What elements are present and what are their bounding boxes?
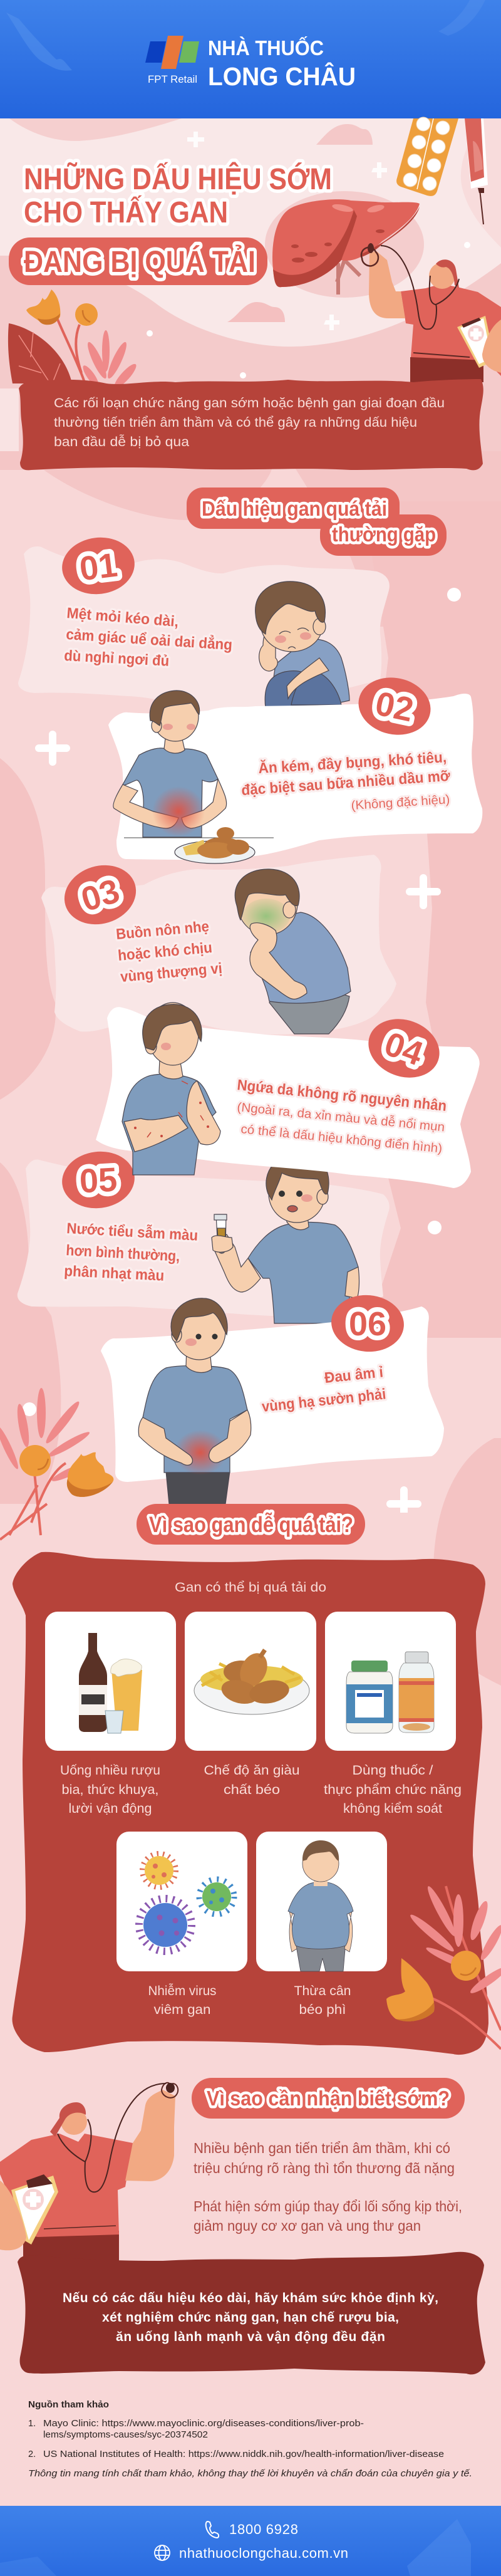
badge 06 [329,1292,406,1355]
caption: virus [148,1984,217,2017]
text: why early paragraphs: triệu chứng rõ ràng thì tổn thương đã nặng [194,2160,455,2176]
card: overweight [256,1832,387,1971]
caption: fatty food: Chế độ ăn giàu [204,1763,299,1778]
heading: common signs [187,488,447,556]
text: sign 05: Nước tiểu sẫm màu [66,1219,199,1244]
text: sign 06: vùng hạ sườn phải [261,1385,387,1416]
text: why early paragraphs: giảm nguy cơ xơ gan và ung thư gan [194,2218,421,2234]
badge 03 [57,857,143,933]
text: sign 05: phân nhạt màu [64,1263,165,1285]
card: virus [116,1832,247,1971]
references: Nguồn tham khảo [28,2400,109,2410]
badge 01: 01 [78,546,120,588]
references [28,2400,472,2479]
text: intro paragraph: ban đầu dễ bị bỏ qua [54,435,189,449]
illustration: right rib pain man [138,1298,251,1504]
text: sign 03: hoặc khó chịu [117,939,213,964]
text: intro paragraph [54,396,445,449]
illustration: nauseous man [235,869,351,1034]
text: call to action: Nếu có các dấu hiệu kéo dài, hãy khám sức khỏe định kỳ, [63,2291,438,2305]
panel: sign 02 [108,671,482,863]
references: lems/symptoms-causes/syc-20374502 [43,2430,208,2440]
illustration: flowers top left [8,289,139,390]
text: causes intro: Gan có thể bị quá tải do [175,1580,326,1595]
logo: Nhà Thuốc Long Châu [208,36,356,91]
text: why early paragraphs: Nhiều bệnh gan tiến triển âm thầm, khi có [194,2140,450,2156]
illustration: man with urine tube [212,1152,359,1323]
caption: medicine: không kiểm soát [343,1802,442,1816]
heading: why liver overloads [137,1504,365,1545]
card: fatty food [185,1612,316,1751]
text: sign 01: dù nghỉ ngơi đủ [64,647,170,670]
illustration: flowers right [386,1884,501,2049]
logo: FPT Retail [145,36,199,85]
decorative plus and dots [23,132,470,1513]
badge 03: 03 [77,872,124,919]
text: sign 04 [236,1077,447,1155]
text: sign 04: (Ngoài ra, da xỉn màu và dễ nổi mụn [237,1100,445,1134]
caption: medicine: Dùng thuốc / [352,1763,433,1778]
title: CHO THẤY GAN [24,196,228,229]
caption: virus: viêm gan [154,2003,210,2017]
text: sign 03: Buồn nôn nhẹ [115,918,210,943]
illustration: doctor pointing [0,2083,178,2262]
text: sign 06: Đau âm ỉ [324,1364,384,1387]
text: sign 02: Ăn kém, đầy bụng, khó tiêu, [258,748,447,777]
text: sign 01: cảm giác uể oải dai dẳng [66,625,233,654]
caption: virus: Nhiễm virus [148,1984,217,1998]
text: call to action [63,2291,438,2344]
title highlight pill: ĐANG BỊ QUÁ TẢI [24,244,256,279]
caption: overweight [294,1984,351,2017]
panel: sign 03 [41,855,396,1035]
caption: alcohol [60,1763,160,1816]
heading: why liver overloads: Vì sao gan dễ quá tải? [149,1512,353,1537]
references: 1. [28,2419,36,2429]
title: NHỮNG DẤU HIỆU SỚM [24,162,332,196]
title highlight pill [9,237,267,285]
text: sign 02: đặc biệt sau bữa nhiều dầu mỡ [241,768,451,799]
references: 2. [28,2449,36,2459]
panel: sign 06 [101,1292,444,1504]
illustration: tired man sitting [256,581,349,708]
references: Thông tin mang tính chất tham khảo, không thay thế lời khuyên và chẩn đoán của chuyên gia y tế. [28,2469,472,2479]
caption: alcohol: lười vận động [69,1802,152,1816]
text: phone number: 1800 6928 [229,2521,298,2537]
illustration: doctor with stethoscope [361,243,501,382]
logo: Nhà Thuốc Long Châu: LONG CHÂU [208,62,356,91]
icon: globe [155,2545,170,2560]
header band [0,0,501,118]
card: medicine [325,1612,456,1751]
illustration: flowers left [0,1388,113,1540]
text: intro paragraph: Các rối loạn chức năng gan sớm hoặc bệnh gan giai đoạn đầu [54,396,445,410]
text: intro paragraph: thường tiến triển âm thầm và có thể gây ra những dấu hiệu [54,415,417,430]
panel: sign 05 [18,1147,390,1323]
footer band [0,2506,501,2576]
text: sign 02: (Không đặc hiệu) [351,793,450,813]
heading: why recognise early: Vì sao cần nhận biết sớm? [207,2087,450,2110]
badge 02 [353,671,436,741]
panel: intro [19,379,483,470]
title [24,162,332,229]
logo: FPT Retail: FPT Retail [148,73,197,85]
panel: causes [12,1552,488,2055]
caption: medicine: thực phẩm chức năng [324,1783,462,1797]
text: sign 01: Mệt mỏi kéo dài, [66,605,179,630]
text: call to action: ăn uống lành mạnh và vận động đều đặn [116,2330,385,2344]
text: sign 05 [64,1219,199,1285]
card: alcohol [45,1612,176,1751]
badge 05 [59,1147,138,1212]
caption: fatty food [204,1763,299,1797]
references: Mayo Clinic: https://www.mayoclinic.org/diseases-conditions/liver-prob- [43,2419,364,2429]
panel: call to action [18,2252,485,2374]
text: sign 02 [241,748,451,813]
text: why early paragraphs [194,2140,462,2234]
badge 05: 05 [78,1160,118,1201]
caption: alcohol: Uống nhiều rượu [60,1763,160,1778]
illustration: blister pack [396,117,458,196]
badge 06: 06 [349,1305,386,1343]
illustration: stomach pain man with fried food [113,691,274,863]
text: sign 01 [64,605,233,670]
text: sign 04: Ngứa da không rõ nguyên nhân [236,1077,447,1115]
caption: fatty food: chất béo [224,1783,280,1797]
caption: alcohol: bia, thức khuya, [61,1783,159,1797]
caption: medicine [324,1763,462,1816]
illustration: syringe [465,118,488,224]
text: website: nhathuoclongchau.com.vn [179,2545,348,2561]
text: call to action: xét nghiệm chức năng gan, hạn chế rượu bia, [102,2310,399,2325]
caption: overweight: béo phì [299,2003,346,2017]
text: sign 05: hơn bình thường, [66,1242,180,1265]
badge 02: 02 [372,684,416,729]
panel: sign 04 [96,1003,480,1188]
badge 04 [360,1009,448,1087]
text: why early paragraphs: Phát hiện sớm giúp thay đổi lối sống kịp thời, [194,2198,462,2214]
illustration: itchy skin man [122,1003,220,1175]
text: sign 04: có thể là dấu hiệu không điển hình) [240,1122,443,1155]
badge 01 [59,533,138,598]
heading: common signs: Dấu hiệu gan quá tải [202,497,387,520]
badge 04: 04 [380,1025,428,1073]
caption: overweight: Thừa cân [294,1984,351,1998]
logo: Nhà Thuốc Long Châu: NHÀ THUỐC [208,36,324,60]
icon: phone [206,2521,219,2538]
references: US National Institutes of Health: https://www.niddk.nih.gov/health-information/liver-disease [43,2449,444,2459]
panel: sign 01 [18,533,390,716]
heading: common signs: thường gặp [332,523,436,546]
illustration: liver [265,191,424,298]
text: sign 03: vùng thượng vị [120,960,223,986]
text: sign 03 [115,918,223,986]
text: sign 06 [261,1364,387,1416]
heading: why recognise early [192,2078,465,2119]
